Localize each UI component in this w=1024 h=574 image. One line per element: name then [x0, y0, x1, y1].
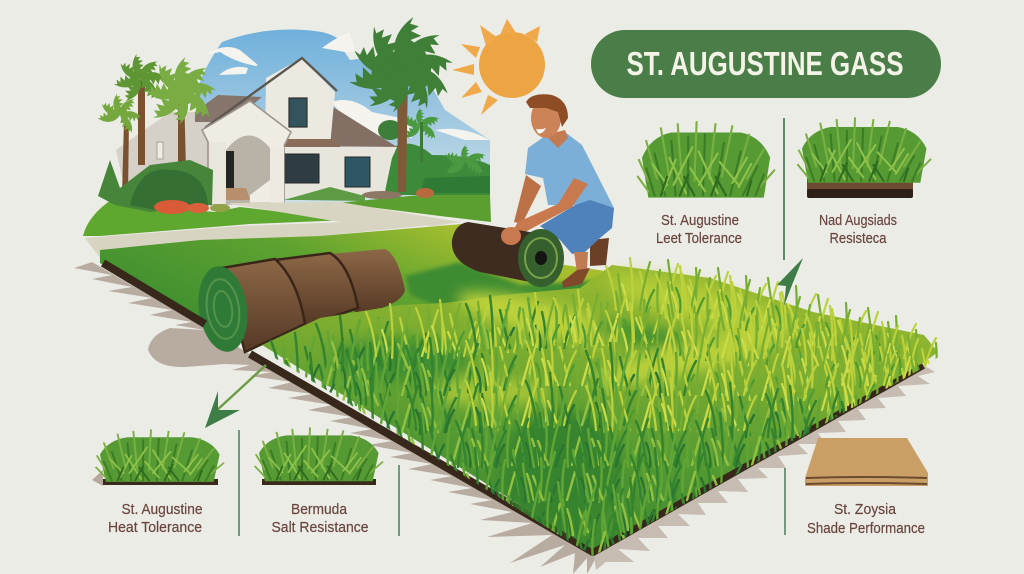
divider — [783, 118, 785, 260]
soil — [262, 479, 376, 485]
upper gable wall — [265, 58, 335, 147]
grass sample: bottom middle — [255, 428, 382, 518]
lawn soil edge — [103, 263, 923, 552]
label: St. Zoysia — [834, 501, 897, 518]
arch — [226, 135, 270, 203]
grass sample: top right — [798, 118, 931, 229]
label line: Resisteca — [830, 230, 887, 247]
soil — [103, 479, 218, 485]
head — [531, 98, 561, 138]
grass sample: top left — [638, 122, 774, 229]
background trees — [378, 108, 490, 195]
sod edge shadow — [74, 262, 935, 574]
tuft — [638, 122, 774, 198]
label line: Leet Tolerance — [656, 230, 742, 247]
arrow up right — [777, 258, 803, 306]
left arm — [514, 175, 541, 224]
house — [116, 58, 397, 204]
sidewalk — [85, 218, 462, 260]
back lawn — [100, 224, 612, 345]
small roll end — [518, 229, 564, 287]
soil block — [807, 170, 913, 190]
dark lawn by the roll — [405, 262, 605, 312]
left shadow — [74, 262, 597, 574]
title text: ST. AUGUSTINE GASS — [626, 45, 904, 82]
sod sample: zoysia — [805, 438, 928, 518]
hand — [501, 227, 521, 245]
porch gable — [202, 101, 291, 204]
arrow down left — [205, 365, 266, 428]
metal roof — [282, 139, 340, 147]
walkway — [225, 202, 460, 226]
small roll — [452, 222, 555, 285]
lower windows — [282, 154, 319, 183]
front lawn — [83, 198, 348, 236]
steps — [226, 188, 250, 200]
grass sample: bottom left — [92, 430, 223, 518]
label: Bermuda — [291, 501, 348, 518]
right arm — [512, 178, 588, 232]
divider — [784, 468, 786, 535]
title pill — [591, 30, 941, 98]
label line: Shade Performance — [807, 520, 925, 537]
hair — [526, 94, 568, 127]
clouds — [205, 32, 490, 140]
sod top — [805, 438, 928, 486]
roll 3 — [330, 249, 405, 314]
door — [224, 151, 234, 188]
roll end — [193, 263, 253, 355]
lawn base — [262, 265, 938, 549]
sun icon — [452, 19, 545, 115]
label: St. Augustine — [122, 501, 202, 518]
right lawn — [337, 195, 491, 222]
divider — [398, 465, 400, 536]
roll 1 — [222, 259, 305, 352]
label line: Salt Resistance — [272, 519, 368, 536]
roll 2 — [275, 253, 358, 326]
columns — [209, 142, 226, 204]
main lawn — [103, 258, 956, 562]
sky — [196, 30, 490, 205]
label line: Heat Tolerance — [108, 519, 202, 536]
right roof — [290, 102, 397, 147]
sod rolls — [193, 249, 405, 355]
shadow — [92, 470, 103, 486]
right shadow — [594, 366, 935, 570]
upper window — [289, 98, 307, 127]
sod stripes — [806, 477, 927, 484]
smile — [536, 128, 546, 133]
shrubs and flowers — [98, 160, 434, 214]
shoe — [562, 268, 590, 288]
tuft — [255, 428, 382, 481]
shirt — [525, 132, 614, 208]
shin — [574, 252, 588, 272]
palms — [97, 15, 455, 195]
right wall — [282, 146, 397, 198]
neck — [545, 130, 568, 148]
boot — [590, 238, 609, 266]
label: Nad Augsiads — [819, 212, 897, 229]
left wing — [116, 112, 212, 200]
man kneeling — [452, 94, 614, 288]
tuft — [96, 430, 223, 482]
jeans — [540, 196, 614, 254]
left roof — [195, 95, 262, 122]
label: St. Augustine — [661, 212, 739, 229]
lawn colour bands — [271, 258, 956, 562]
divider — [238, 430, 240, 536]
tuft — [798, 118, 931, 183]
grass blades — [271, 258, 956, 562]
illustration: house scene — [83, 15, 491, 260]
